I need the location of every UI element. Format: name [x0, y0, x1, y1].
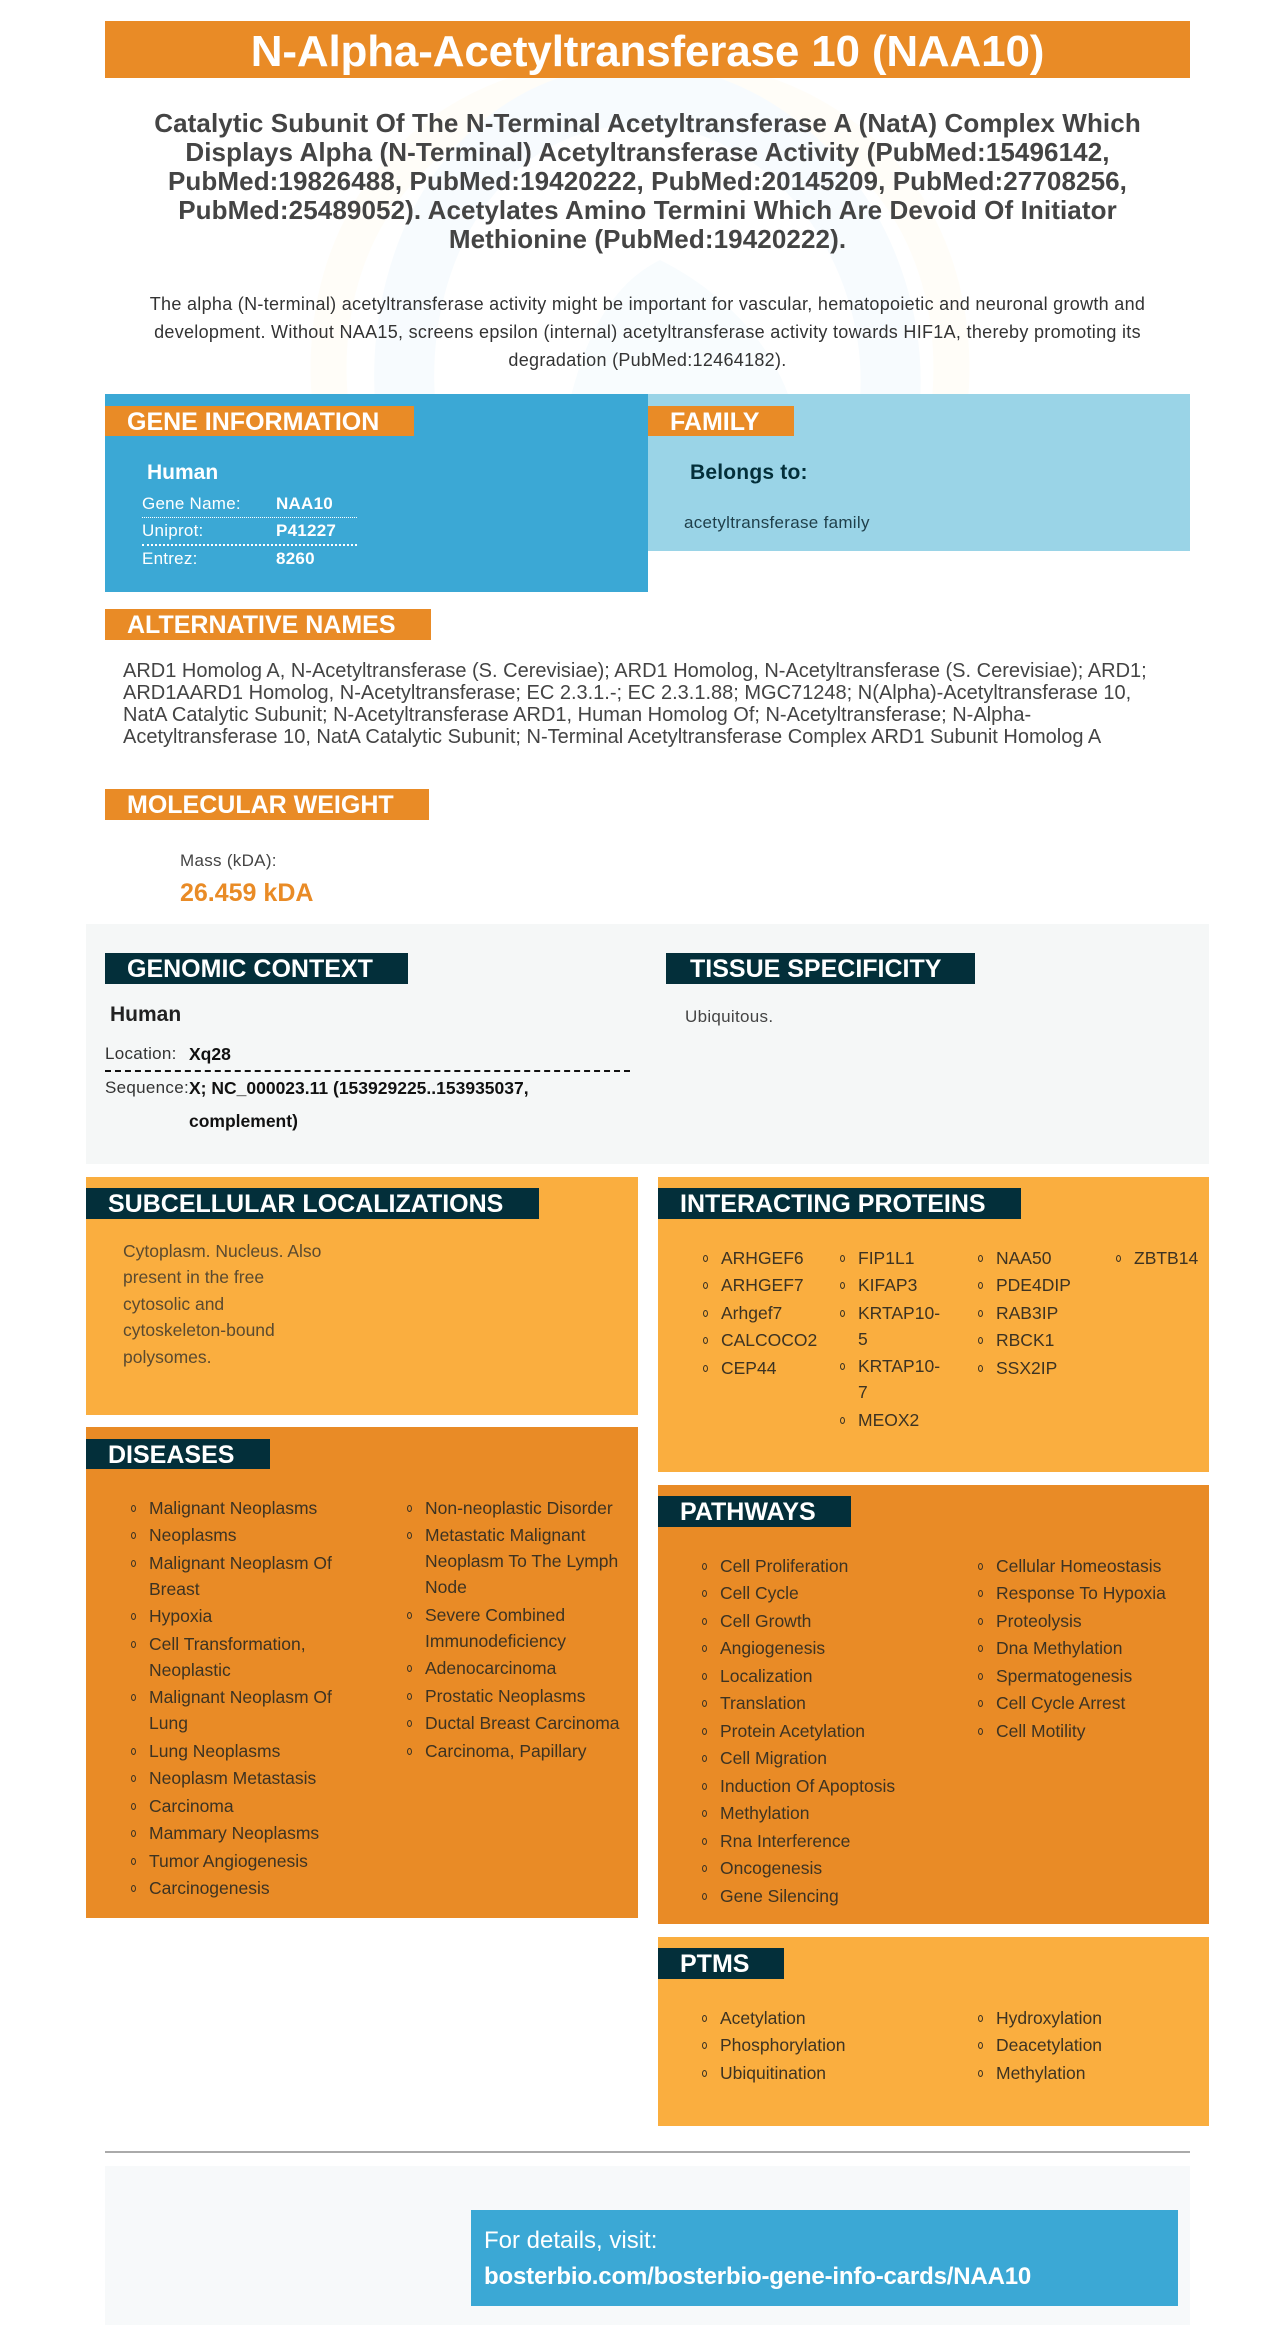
subtitle: Displays Alpha (N-Terminal) Acetyltransferase Activity (PubMed:15496142, — [185, 137, 1110, 167]
protein list column 1: Arhgef7 — [721, 1303, 782, 1323]
disease list column 1: Cell Transformation, — [149, 1634, 306, 1654]
species label: Human — [147, 461, 218, 484]
alternative names text: Acetyltransferase 10, NatA Catalytic Subunit; N-Terminal Acetyltransferase Complex ARD1 Subunit Homolog A — [123, 726, 1101, 748]
location row: Xq28 — [189, 1044, 231, 1064]
heading: family — [648, 406, 794, 436]
alternative names text: ARD1 Homolog A, N-Acetyltransferase (S. Cerevisiae); ARD1 Homolog, N-Acetyltransferase (S. Cerevisiae); ARD1; — [123, 660, 1147, 682]
heading: diseases: DISEASES — [108, 1441, 234, 1469]
disease list column 2: Ductal Breast Carcinoma — [425, 1713, 620, 1733]
heading: molecular weight: MOLECULAR WEIGHT — [127, 791, 394, 819]
panel: subcellular localizations — [86, 1177, 638, 1415]
heading: pathways — [658, 1496, 851, 1527]
disease list column 1: Malignant Neoplasms — [149, 1498, 317, 1518]
heading: gene information: GENE INFORMATION — [127, 408, 379, 436]
tissue specificity text: Ubiquitous. — [685, 1007, 773, 1026]
gene fields: Entrez: — [142, 549, 198, 568]
panel: family — [648, 394, 1190, 551]
localization text: present in the free — [123, 1267, 264, 1287]
panel: gene information — [105, 394, 648, 592]
disease list column 2: Neoplasm To The Lymph — [425, 1551, 618, 1571]
disease list column 1: Carcinoma — [149, 1796, 234, 1816]
pathway list column 1: Cell Cycle — [720, 1583, 799, 1603]
disease list column 1: Lung Neoplasms — [149, 1741, 280, 1761]
pathway list column 1: Translation — [720, 1693, 806, 1713]
callout: details link — [471, 2210, 1178, 2306]
protein list column 2: MEOX2 — [858, 1410, 919, 1430]
disease list column 2: Carcinoma, Papillary — [425, 1741, 586, 1761]
panel: genomic context and tissue specificity — [86, 924, 1209, 1164]
sequence row: complement) — [189, 1111, 298, 1131]
protein list column 2 — [840, 1248, 940, 1430]
pathway list column 1: Cell Proliferation — [720, 1556, 848, 1576]
description paragraph: The alpha (N-terminal) acetyltransferase activity might be important for vascular, hematopoietic and neuronal growth and — [150, 294, 1145, 314]
subtitle: PubMed:19826488, PubMed:19420222, PubMed:20145209, PubMed:27708256, — [168, 166, 1127, 196]
pathway list column 1: Angiogenesis — [720, 1638, 825, 1658]
details url: bosterbio.com/bosterbio-gene-info-cards/NAA10 — [484, 2263, 1031, 2290]
disease list column 2: Immunodeficiency — [425, 1631, 566, 1651]
protein list column 1: CALCOCO2 — [721, 1330, 817, 1350]
localization text: cytosolic and — [123, 1294, 224, 1314]
gene fields: 8260 — [276, 549, 315, 568]
disease list column 2: Severe Combined — [425, 1605, 565, 1625]
pathway list column 2 — [978, 1556, 1166, 1741]
localization text: polysomes. — [123, 1347, 212, 1367]
protein list column 2: 5 — [858, 1329, 868, 1349]
dashed divider — [105, 1070, 630, 1072]
protein list column 1 — [703, 1248, 817, 1378]
description paragraph: development. Without NAA15, screens epsilon (internal) acetyltransferase activity towards HIF1A, thereby promoting its — [154, 322, 1141, 342]
pathway list column 1: Methylation — [720, 1803, 810, 1823]
pathway list column 1: Protein Acetylation — [720, 1721, 865, 1741]
title: N-Alpha-Acetyltransferase 10 (NAA10) — [251, 27, 1044, 76]
species label: Human — [110, 1003, 181, 1026]
heading: subcellular localizations: SUBCELLULAR LOCALIZATIONS — [108, 1190, 503, 1218]
location row — [105, 1044, 231, 1064]
panel: ptms — [658, 1937, 1209, 2126]
protein list column 2: KRTAP10- — [858, 1356, 940, 1376]
localization text: cytoskeleton-bound — [123, 1320, 275, 1340]
gene fields: Uniprot: — [142, 521, 204, 540]
disease list column 2: Node — [425, 1577, 467, 1597]
pathway list column 1: Cell Migration — [720, 1748, 827, 1768]
heading: genomic context: GENOMIC CONTEXT — [127, 955, 373, 983]
sequence row: Sequence: — [105, 1078, 189, 1097]
mass value: 26.459 kDA — [180, 879, 313, 907]
pathway list column 1: Localization — [720, 1666, 812, 1686]
alternative names text — [123, 660, 1147, 748]
gene fields: NAA10 — [276, 494, 333, 513]
ptm list column 1: Acetylation — [720, 2008, 806, 2028]
disease list column 1: Malignant Neoplasm Of — [149, 1553, 332, 1573]
pathway list column 1 — [702, 1556, 895, 1906]
belongs to label: Belongs to: — [690, 461, 808, 484]
protein list column 2: KIFAP3 — [858, 1275, 917, 1295]
protein list column 1: ARHGEF6 — [721, 1248, 804, 1268]
heading: tissue specificity: TISSUE SPECIFICITY — [690, 955, 941, 983]
disease list column 2: Prostatic Neoplasms — [425, 1686, 585, 1706]
pathway list column 2: Dna Methylation — [996, 1638, 1122, 1658]
description paragraph — [150, 294, 1145, 370]
disease list column 1 — [131, 1498, 332, 1898]
panel: interacting proteins — [658, 1177, 1209, 1472]
description paragraph: degradation (PubMed:12464182). — [508, 350, 787, 370]
pathway list column 2: Response To Hypoxia — [996, 1583, 1166, 1603]
panel: pathways — [658, 1485, 1209, 1924]
protein list column 3: RBCK1 — [996, 1330, 1054, 1350]
heading: family: FAMILY — [670, 408, 759, 436]
ptm list column 2: Deacetylation — [996, 2035, 1102, 2055]
disease list column 1: Lung — [149, 1713, 188, 1733]
heading: pathways: PATHWAYS — [680, 1498, 816, 1526]
subtitle: PubMed:25489052). Acetylates Amino Termini Which Are Devoid Of Initiator — [178, 195, 1117, 225]
heading: alternative names: ALTERNATIVE NAMES — [127, 611, 396, 639]
subtitle — [154, 108, 1141, 254]
ptm list column 2 — [978, 2008, 1102, 2083]
protein list column 3 — [978, 1248, 1071, 1378]
subtitle: Catalytic Subunit Of The N-Terminal Acetyltransferase A (NatA) Complex Which — [154, 108, 1141, 138]
disease list column 1: Neoplastic — [149, 1660, 231, 1680]
protein list column 1: CEP44 — [721, 1358, 776, 1378]
subtitle: Methionine (PubMed:19420222). — [449, 224, 846, 254]
pathway list column 2: Spermatogenesis — [996, 1666, 1132, 1686]
localization text: Cytoplasm. Nucleus. Also — [123, 1241, 321, 1261]
background watermark logo — [0, 0, 1288, 400]
protein list column 2: FIP1L1 — [858, 1248, 914, 1268]
alternative names text: ARD1AARD1 Homolog, N-Acetyltransferase; EC 2.3.1.-; EC 2.3.1.88; MGC71248; N(Alpha)-Acetyltransferase 10, — [123, 682, 1131, 704]
ptm list column 2: Hydroxylation — [996, 2008, 1102, 2028]
protein list column 3: SSX2IP — [996, 1358, 1057, 1378]
gene fields: Gene Name: — [142, 494, 241, 513]
sequence row: X; NC_000023.11 (153929225..153935037, — [189, 1078, 529, 1098]
protein list column 3: RAB3IP — [996, 1303, 1058, 1323]
protein list column 3: NAA50 — [996, 1248, 1051, 1268]
heading: interacting proteins: INTERACTING PROTEINS — [680, 1190, 986, 1218]
protein list column 3: PDE4DIP — [996, 1275, 1071, 1295]
ptm list column 1 — [702, 2008, 846, 2083]
disease list column 1: Malignant Neoplasm Of — [149, 1687, 332, 1707]
pathway list column 2: Cellular Homeostasis — [996, 1556, 1161, 1576]
pathway list column 1: Gene Silencing — [720, 1886, 839, 1906]
disease list column 1: Carcinogenesis — [149, 1878, 270, 1898]
ptm list column 2: Methylation — [996, 2063, 1086, 2083]
location row: Location: — [105, 1044, 177, 1063]
family value: acetyltransferase family — [684, 513, 870, 532]
disease list column 2: Metastatic Malignant — [425, 1525, 586, 1545]
panel: diseases — [86, 1427, 638, 1918]
heading: ptms: PTMS — [680, 1950, 749, 1978]
pathway list column 2: Cell Cycle Arrest — [996, 1693, 1125, 1713]
pathway list column 1: Cell Growth — [720, 1611, 811, 1631]
disease list column 2 — [407, 1498, 620, 1761]
disease list column 1: Breast — [149, 1579, 200, 1599]
title — [105, 21, 1190, 78]
ptm list column 1: Phosphorylation — [720, 2035, 846, 2055]
protein list column 1: ARHGEF7 — [721, 1275, 804, 1295]
panel: footer — [105, 2166, 1190, 2325]
pathway list column 1: Oncogenesis — [720, 1858, 822, 1878]
disease list column 2: Adenocarcinoma — [425, 1658, 556, 1678]
disease list column 1: Tumor Angiogenesis — [149, 1851, 308, 1871]
pathway list column 1: Rna Interference — [720, 1831, 850, 1851]
alternative names text: NatA Catalytic Subunit; N-Acetyltransferase ARD1, Human Homolog Of; N-Acetyltransferase; N-Alpha- — [123, 704, 1031, 726]
heading: diseases — [86, 1439, 270, 1469]
disease list column 1: Neoplasms — [149, 1525, 237, 1545]
localization text — [123, 1241, 321, 1367]
gene fields — [142, 494, 357, 568]
disease list column 1: Neoplasm Metastasis — [149, 1768, 316, 1788]
protein list column 2: 7 — [858, 1382, 868, 1402]
gene fields: P41227 — [276, 521, 336, 540]
pathway list column 2: Cell Motility — [996, 1721, 1085, 1741]
ptm list column 1: Ubiquitination — [720, 2063, 826, 2083]
pathway list column 2: Proteolysis — [996, 1611, 1082, 1631]
pathway list column 1: Induction Of Apoptosis — [720, 1776, 895, 1796]
mass label: Mass (kDA): — [180, 851, 277, 870]
disease list column 2: Non-neoplastic Disorder — [425, 1498, 613, 1518]
protein list column 4: ZBTB14 — [1134, 1248, 1198, 1268]
heading: ptms — [658, 1948, 784, 1979]
sequence row — [105, 1078, 529, 1131]
disease list column 1: Mammary Neoplasms — [149, 1823, 319, 1843]
details label: For details, visit: — [484, 2227, 657, 2254]
disease list column 1: Hypoxia — [149, 1606, 212, 1626]
protein list column 2: KRTAP10- — [858, 1303, 940, 1323]
